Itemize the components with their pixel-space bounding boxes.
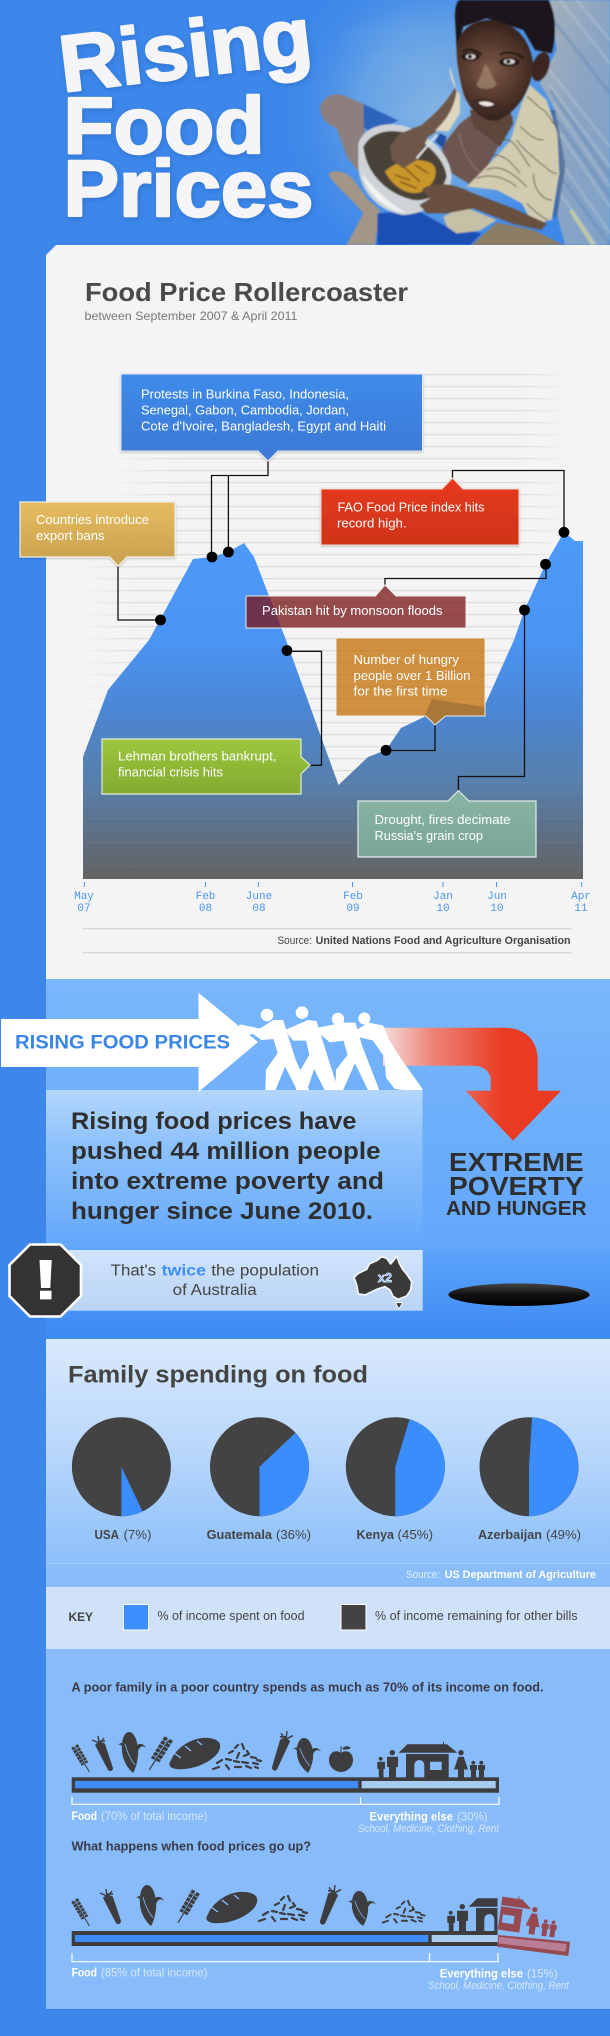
x axis ticks and labels: Feb — [343, 891, 363, 903]
pie chart: USA: USA — [94, 1528, 119, 1542]
white arrow with label — [1, 993, 258, 1092]
x axis ticks and labels: 10 — [490, 903, 504, 915]
ear — [531, 51, 551, 82]
callout: protests: Cote d'Ivoire, Bangladesh, Egypt and Haiti — [141, 419, 386, 434]
chart subheading: between September 2007 & April 2011 — [84, 309, 298, 323]
callout: Lehman brothers: financial crisis hits — [118, 765, 223, 780]
sentence: what happens: What happens when food prices go up? — [72, 1839, 311, 1854]
callout: export bans — [20, 502, 175, 566]
title: Rising Food Prices: Food — [64, 81, 264, 170]
spoon — [417, 135, 437, 158]
pot — [358, 124, 452, 215]
pie source: Source: — [406, 1569, 440, 1581]
title: Rising Food Prices — [54, 0, 316, 233]
callout: twice the population — [46, 1250, 423, 1311]
arm and hand in pot — [390, 87, 460, 168]
nose — [477, 63, 497, 89]
chest — [442, 113, 513, 187]
x axis ticks and labels: Jun — [487, 891, 507, 903]
label: everything else 15%: Everything else — [440, 1966, 523, 1980]
panel: income bars — [46, 1649, 610, 2009]
label: everything else 15% — [428, 1966, 570, 1992]
callout: FAO record high: record high. — [337, 516, 406, 531]
icon: warning octagon — [10, 1244, 81, 1316]
chart heading: Food Price Rollercoaster — [85, 277, 408, 307]
neck — [470, 110, 513, 147]
data point markers — [155, 527, 569, 756]
callout: twice the population: of Australia — [173, 1282, 257, 1299]
text platform and statement: into extreme poverty and — [71, 1168, 384, 1195]
extreme poverty label: AND HUNGER — [446, 1198, 587, 1220]
callout: export bans: Countries introduce — [36, 512, 149, 527]
key legend: KEY — [68, 1610, 93, 1624]
label: food 70%: Food — [72, 1809, 97, 1823]
shorts lower — [377, 210, 482, 245]
pie chart: Guatemala — [207, 1417, 311, 1542]
falling piece of bar and house — [497, 1894, 570, 1956]
callout: Pakistan floods: Pakistan hit by monsoon floods — [262, 603, 443, 618]
icon: family and house row 2 — [447, 1898, 498, 1931]
sentence: 70% of income: A poor family in a poor country spends as much as 70% of its income on food. — [72, 1680, 544, 1695]
label: food 70%: (70% of total income) — [101, 1809, 208, 1823]
income bar row 2 — [72, 1931, 497, 1946]
shorts upper — [363, 104, 398, 132]
callout: hungry people: people over 1 Billion — [354, 668, 470, 683]
knee and leg — [320, 94, 365, 172]
key legend: % of income remaining for other bills — [375, 1609, 578, 1623]
white arrow with label: RISING FOOD PRICES — [15, 1032, 230, 1054]
extreme poverty label: EXTREME — [449, 1147, 584, 1177]
icon: Australia map x2: x2 — [378, 1271, 392, 1285]
key legend — [46, 1587, 610, 1649]
pie chart: Kenya: Kenya — [356, 1528, 395, 1542]
pie chart: Azerbaijan — [478, 1417, 581, 1542]
food icons row 2 — [73, 1885, 424, 1926]
pie source: US Department of Agriculture — [445, 1569, 596, 1581]
pie chart: Kenya — [346, 1417, 445, 1542]
x axis ticks and labels: Feb — [196, 891, 215, 903]
shirt lower — [443, 207, 497, 233]
pie chart: Azerbaijan: Azerbaijan — [478, 1528, 542, 1542]
x axis ticks and labels: 08 — [252, 903, 266, 915]
callout: Pakistan floods — [246, 585, 466, 628]
pie chart: USA: (7%) — [124, 1528, 152, 1542]
callout: hungry people: Number of hungry — [354, 652, 459, 667]
callout: hungry people — [336, 638, 485, 725]
x axis ticks and labels: 09 — [346, 903, 360, 915]
mouth — [474, 98, 498, 108]
wall — [540, 0, 610, 245]
pie chart: Guatemala: (36%) — [276, 1528, 311, 1542]
label: everything else 15%: School, Medicine, Clothing, Rent — [428, 1980, 570, 1992]
panel: extreme poverty section — [1, 979, 610, 1339]
chart source: United Nations Food and Agriculture Organisation — [316, 935, 571, 947]
callout: FAO record high — [321, 478, 519, 545]
callout: Russia drought: Drought, fires decimate — [374, 812, 510, 827]
label: food 85%: (85% of total income) — [101, 1966, 208, 1980]
chart source: Source: — [278, 935, 312, 947]
x axis ticks and labels: May — [74, 891, 94, 903]
callout: Russia drought — [358, 791, 536, 857]
callout: protests — [121, 374, 422, 461]
callout: Lehman brothers: Lehman brothers bankrupt, — [118, 749, 276, 764]
callout: protests: Protests in Burkina Faso, Indonesia, — [141, 387, 349, 402]
pie chart: USA — [72, 1417, 171, 1542]
bracket row 2 — [72, 1953, 498, 1962]
key legend: % of income spent on food — [158, 1609, 305, 1623]
connector lines — [118, 461, 564, 790]
text platform and statement — [46, 1090, 422, 1250]
hair — [455, 0, 555, 53]
text platform and statement: Rising food prices have — [71, 1108, 356, 1135]
x axis ticks and labels: 07 — [77, 903, 91, 915]
heading: Family spending on food — [68, 1362, 368, 1389]
black hole — [448, 1283, 590, 1306]
callout: FAO record high: FAO Food Price index hits — [338, 500, 485, 515]
label: everything else 15%: (15%) — [527, 1966, 558, 1980]
icon: family and house row 1 — [377, 1742, 485, 1778]
callout: Lehman brothers — [102, 739, 310, 794]
pie chart: Guatemala: Guatemala — [207, 1528, 273, 1542]
x axis ticks and labels: 08 — [199, 903, 212, 915]
label: everything else 30%: (30%) — [457, 1810, 488, 1824]
pie chart: Kenya: (45%) — [398, 1528, 433, 1542]
label: food 85%: Food — [72, 1966, 97, 1980]
area chart — [83, 532, 583, 879]
callout: Russia drought: Russia's grain crop — [374, 828, 483, 843]
label: everything else 30%: School, Medicine, Clothing, Rent — [358, 1823, 500, 1835]
red curved arrow — [383, 1028, 561, 1141]
callout: hungry people: for the first time — [354, 684, 448, 699]
x axis ticks and labels: June — [246, 891, 272, 903]
title: Rising Food Prices: Prices — [64, 144, 314, 233]
x axis ticks and labels: Jan — [433, 891, 453, 903]
shirt main — [467, 85, 559, 224]
shirt left flap — [435, 67, 460, 132]
forearm and lower hand — [419, 184, 547, 230]
income bar row 1 — [72, 1777, 499, 1793]
label: everything else 30%: Everything else — [370, 1810, 453, 1824]
icon: people pushing — [240, 1006, 422, 1089]
bracket row 1 — [72, 1797, 499, 1804]
x axis ticks and labels: 11 — [574, 903, 588, 915]
callout: twice the population: That's — [111, 1262, 156, 1279]
text platform and statement: pushed 44 million people — [71, 1138, 380, 1165]
face — [457, 20, 533, 121]
text platform and statement: hunger since June 2010. — [71, 1198, 373, 1225]
foot and shin — [328, 171, 380, 245]
pie chart: Azerbaijan: (49%) — [546, 1528, 581, 1542]
callout: twice the population: twice — [162, 1262, 206, 1279]
callout: protests: Senegal, Gabon, Cambodia, Jordan, — [141, 403, 349, 418]
icon: Australia map x2 — [354, 1256, 412, 1309]
panel: family spending on food — [46, 1339, 610, 1649]
label: everything else 30% — [358, 1810, 500, 1835]
extreme poverty label: POVERTY — [449, 1171, 584, 1201]
brows and eye sockets — [463, 50, 524, 58]
callout: export bans: export bans — [36, 528, 105, 543]
food icons row 1 — [73, 1731, 353, 1773]
x axis ticks and labels: 10 — [436, 903, 450, 915]
header photo: boy eating from a pot — [314, 0, 610, 245]
x axis ticks and labels — [74, 882, 591, 915]
extreme poverty label — [446, 1147, 587, 1220]
x axis ticks and labels: Apr — [571, 891, 591, 903]
callout: twice the population: the population — [211, 1262, 319, 1279]
dirt — [472, 223, 563, 245]
panel: food price rollercoaster — [20, 245, 610, 979]
